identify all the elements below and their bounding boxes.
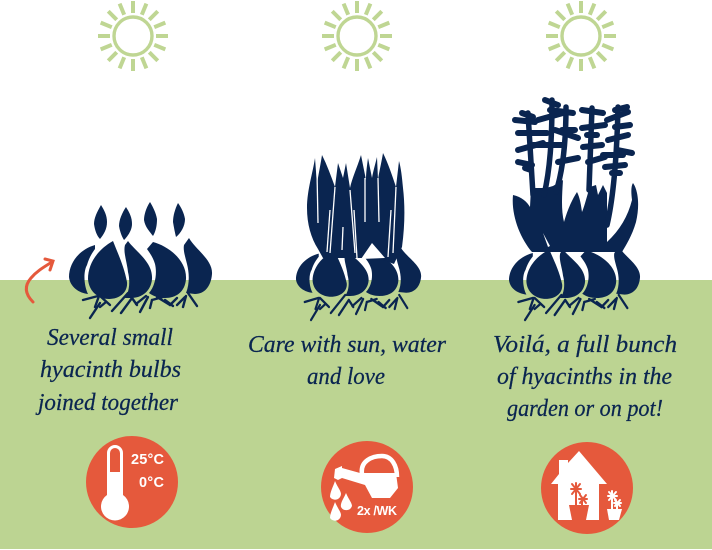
text: step 2 — [248, 332, 447, 390]
text: step 2: and love — [307, 364, 385, 390]
text: step 1: hyacinth bulbs — [40, 357, 181, 383]
sprout leaves — [307, 153, 404, 264]
icon: sun 2 — [322, 1, 392, 71]
icon: thermometer — [86, 436, 178, 528]
bulb tips — [94, 202, 185, 240]
icon: sun 3 — [546, 1, 616, 71]
leaves — [513, 180, 638, 252]
icon: watering can: 2x /WK — [357, 504, 397, 518]
icon: sun 1 — [98, 1, 168, 71]
text: step 2: Care with sun, water — [248, 332, 447, 358]
text: step 3 — [493, 332, 677, 422]
arrow — [26, 259, 53, 302]
illustration: small bulbs — [69, 202, 212, 318]
illustration: sprouting bulbs — [296, 153, 421, 320]
text: step 1: Several small — [47, 325, 173, 351]
text: step 3: Voilá, a full bunch — [493, 332, 677, 358]
text: step 1: joined together — [35, 390, 179, 416]
text: step 3: of hyacinths in the — [497, 364, 672, 390]
text: step 1 — [35, 325, 181, 416]
icon: house with pots — [541, 442, 633, 534]
white slits — [543, 233, 550, 247]
icon: thermometer: 0°C — [139, 475, 165, 491]
illustration: flowering hyacinths — [509, 100, 640, 320]
flower spikes — [515, 100, 632, 225]
ground — [0, 280, 712, 549]
icon: thermometer: 25°C — [131, 452, 165, 468]
text: step 3: garden or on pot! — [507, 396, 663, 422]
icon: watering can — [321, 441, 413, 533]
